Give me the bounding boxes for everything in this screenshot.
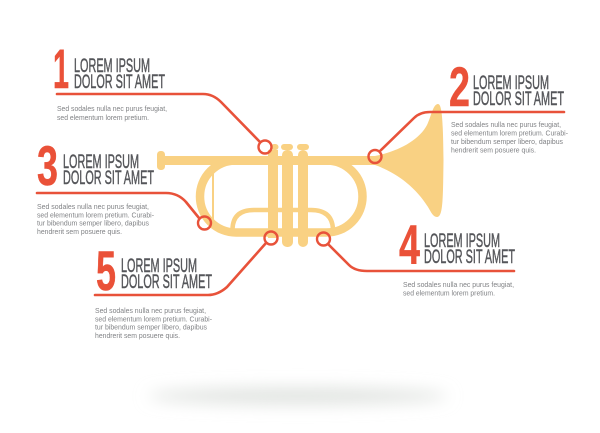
- text block 4: sed elementum lorem pretium.: [403, 288, 495, 298]
- panel: item 5: [95, 232, 278, 340]
- heading 3: DOLOR SIT AMET: [63, 167, 154, 189]
- heading 5: DOLOR SIT AMET: [121, 271, 212, 293]
- connector line 5: [95, 243, 266, 295]
- text block 2: tur bibendum semper libero, dapibus: [451, 137, 563, 146]
- marker circle 1: [258, 140, 272, 154]
- heading 1: LOREM IPSUM: [74, 55, 150, 77]
- text block 2: sed elementum lorem pretium. Curabi-: [451, 128, 569, 138]
- text block 5: sed elementum lorem pretium. Curabi-: [95, 314, 213, 324]
- panel: item 3: [37, 134, 211, 236]
- panel: item 2: [368, 55, 569, 163]
- marker circle 5: [264, 232, 278, 244]
- number 5: 5: [96, 239, 116, 302]
- text block 5: hendrerit sem posuere quis.: [95, 331, 180, 340]
- text block 5: tur bibendum semper libero, dapibus: [95, 322, 207, 332]
- text block 2: hendrerit sem posuere quis.: [451, 146, 536, 154]
- heading 4: DOLOR SIT AMET: [424, 246, 515, 268]
- marker circle 3: [198, 216, 211, 230]
- text block 3: tur bibendum semper libero, dapibus: [37, 218, 149, 228]
- heading 1: DOLOR SIT AMET: [74, 71, 165, 93]
- text block 1: Sed sodales nulla nec purus feugiat,: [57, 104, 167, 113]
- panel: item 1: [53, 37, 272, 154]
- text block 3: hendrerit sem posuere quis.: [37, 227, 122, 236]
- text block 3: sed elementum lorem pretium. Curabi-: [37, 210, 155, 220]
- connector line 2: [380, 112, 564, 151]
- marker circle 4: [317, 232, 330, 246]
- shadow under trumpet: [148, 388, 448, 404]
- text block 4: Sed sodales nulla nec purus feugiat,: [403, 280, 514, 289]
- connector line 4: [328, 244, 514, 271]
- number 3: 3: [37, 134, 58, 197]
- text block 2: Sed sodales nulla nec purus feugiat,: [451, 120, 561, 129]
- heading 5: LOREM IPSUM: [121, 255, 197, 277]
- number 1: 1: [53, 37, 69, 100]
- text block 1: sed elementum lorem pretium.: [57, 113, 149, 122]
- text block 5: Sed sodales nulla nec purus feugiat,: [95, 306, 206, 315]
- icon: trumpet: [157, 104, 444, 247]
- number 4: 4: [399, 213, 420, 276]
- panel: item 4: [317, 213, 515, 298]
- text block 3: Sed sodales nulla nec purus feugiat,: [37, 202, 149, 211]
- marker circle 2: [368, 150, 382, 163]
- connector line 3: [37, 193, 199, 218]
- connector line 1: [57, 94, 260, 142]
- number 2: 2: [449, 55, 470, 118]
- heading 3: LOREM IPSUM: [63, 151, 139, 173]
- heading 4: LOREM IPSUM: [424, 230, 500, 252]
